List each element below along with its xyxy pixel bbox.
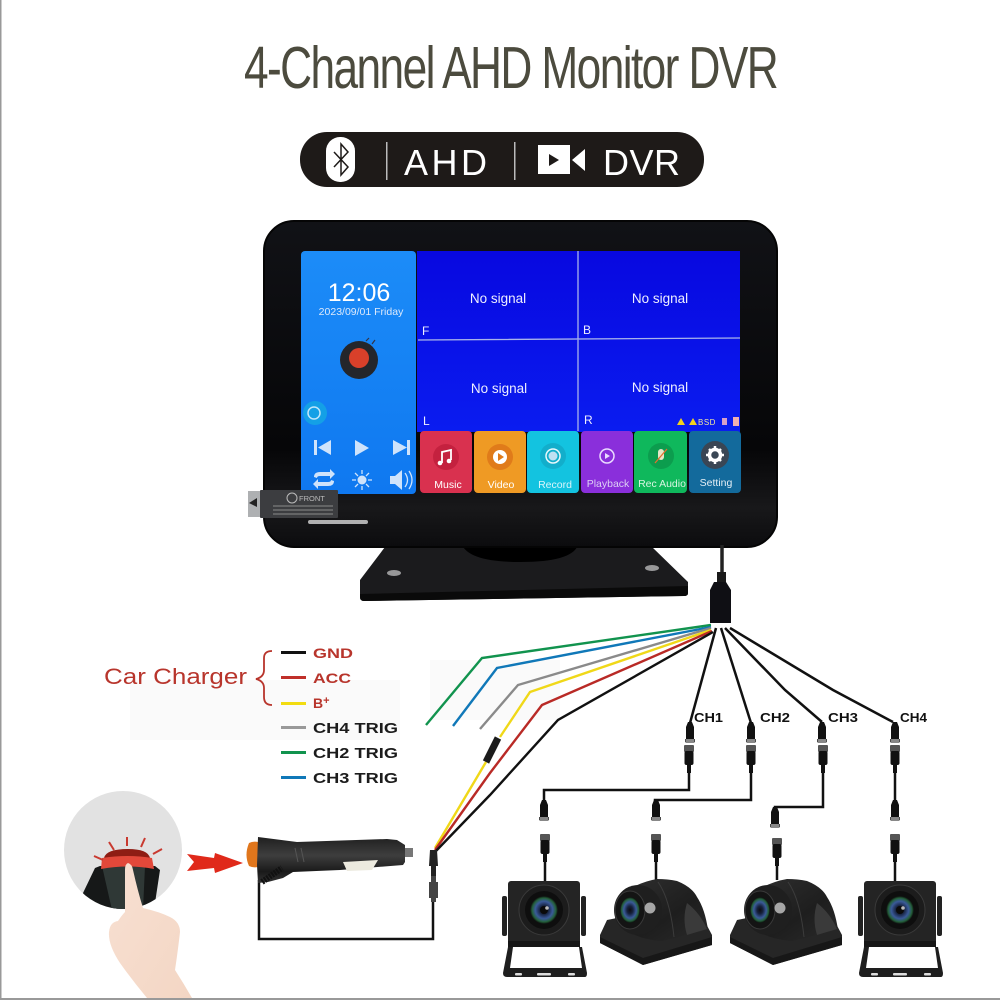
wire: camera 3 link xyxy=(775,768,823,812)
camera view R: R xyxy=(584,413,593,427)
legend: GND: GND xyxy=(313,645,353,661)
app tile: Setting xyxy=(689,431,741,493)
app tile: Music xyxy=(420,431,472,493)
monitor xyxy=(248,221,777,601)
clock: 12:06 xyxy=(328,279,390,307)
legend: CH4 TRIG xyxy=(281,720,398,737)
wire: camera 1 link xyxy=(544,768,689,803)
monitor body xyxy=(264,221,777,547)
car charger label: Car Charger xyxy=(104,664,247,689)
wire: CH1 xyxy=(690,628,716,723)
app tile: Rec Audio xyxy=(634,431,687,493)
legend: CH3 TRIG: CH3 TRIG xyxy=(313,770,398,787)
icon: assistant bubble xyxy=(303,401,327,425)
hand xyxy=(109,863,192,998)
screen: left panel xyxy=(301,251,416,494)
legend: ACC: ACC xyxy=(313,670,351,686)
wire: camera 4 link xyxy=(894,768,896,803)
status icons xyxy=(677,417,739,427)
legend: B+ xyxy=(281,695,330,711)
connectors xyxy=(539,722,900,866)
legend: B+: + xyxy=(323,695,330,707)
app tile: Video: Video xyxy=(488,479,514,491)
camera view B: No signal xyxy=(632,291,688,306)
sticker label: FRONT xyxy=(299,494,325,503)
app tile: Music: Music xyxy=(434,479,462,491)
sticker label xyxy=(248,490,338,518)
legend: CH3 TRIG xyxy=(281,770,398,787)
app tile: Record: Record xyxy=(538,479,572,491)
wire: CH4 xyxy=(730,628,893,722)
wire: red ACC xyxy=(435,631,712,850)
trigger and power wires xyxy=(426,625,713,852)
wire: CH2 xyxy=(721,628,751,723)
car charger plug xyxy=(246,837,438,939)
camera view F xyxy=(422,291,526,338)
camera 1: square xyxy=(502,881,587,977)
brace xyxy=(256,651,272,705)
wire: yellow B+ xyxy=(435,630,711,848)
wire: gray CH4 trig xyxy=(480,628,711,729)
icon: bluetooth xyxy=(326,137,355,182)
camera view B: B xyxy=(583,323,591,337)
app tile: Rec Audio: Rec Audio xyxy=(638,478,686,490)
channel labels xyxy=(694,711,927,725)
red arrow xyxy=(187,853,243,873)
icon: video camera xyxy=(538,145,585,174)
button press illustration xyxy=(64,791,192,998)
camera view F: F xyxy=(422,324,429,338)
channel labels: CH1 xyxy=(694,711,723,725)
legend: GND xyxy=(281,645,353,661)
screen: camera quad view xyxy=(417,251,740,432)
camera view L: L xyxy=(423,414,430,428)
legend: B+: B xyxy=(313,695,323,711)
media controls xyxy=(313,440,412,490)
camera view B xyxy=(583,291,688,337)
wire: CH3 xyxy=(725,628,822,722)
app tile: Setting: Setting xyxy=(700,477,732,489)
channel wires xyxy=(544,628,895,881)
camera view L xyxy=(423,381,527,428)
legend: CH2 TRIG: CH2 TRIG xyxy=(313,745,398,762)
feature badge xyxy=(300,132,704,187)
wire: blue CH3 trig xyxy=(453,627,711,726)
camera view F: No signal xyxy=(470,291,526,306)
app tile: Video xyxy=(474,431,526,493)
legend: CH2 TRIG xyxy=(281,745,398,762)
camera view R: No signal xyxy=(632,380,688,395)
camera 2: dome xyxy=(600,879,712,965)
monitor stand xyxy=(360,545,688,601)
camera view R xyxy=(584,380,688,427)
status icons: BSD xyxy=(698,418,716,427)
badge label: AHD: AHD xyxy=(404,142,487,183)
wire: camera 2 link xyxy=(655,768,751,803)
legend xyxy=(104,645,398,787)
wire: black GND xyxy=(435,632,713,852)
app tile: Record xyxy=(527,431,579,493)
charger inline connector xyxy=(429,850,438,902)
app tile: Playback: Playback xyxy=(587,478,630,490)
legend: CH4 TRIG: CH4 TRIG xyxy=(313,720,398,737)
app tile: Playback xyxy=(581,431,633,493)
title: 4-Channel AHD Monitor DVR xyxy=(244,36,779,102)
power cable and hub xyxy=(710,545,731,623)
camera 3: dome xyxy=(730,879,842,965)
legend: ACC xyxy=(281,670,351,686)
channel labels: CH3 xyxy=(828,711,858,725)
channel labels: CH4 xyxy=(900,711,927,725)
channel labels: CH2 xyxy=(760,711,790,725)
date: 2023/09/01 Friday xyxy=(319,306,404,318)
icon: music disc xyxy=(340,338,378,379)
inline fuse xyxy=(486,738,498,762)
camera 4: square xyxy=(858,881,943,977)
badge label: DVR: DVR xyxy=(603,142,680,183)
camera view L: No signal xyxy=(471,381,527,396)
wire: green CH2 trig xyxy=(426,625,711,725)
